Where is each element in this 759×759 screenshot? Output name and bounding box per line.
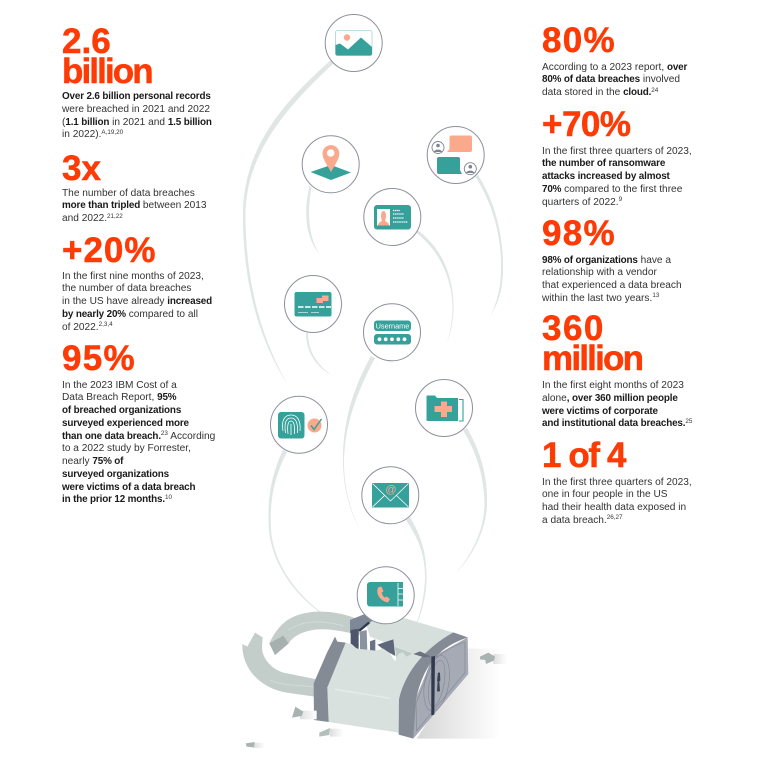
text: 95%: in the prior 12 months.10 bbox=[62, 494, 172, 505]
text: 360 million bbox=[542, 380, 692, 429]
text: 1 of 4: one in four people in the US bbox=[542, 489, 668, 500]
icon: image bbox=[325, 14, 382, 72]
text: +20%: by nearly 20% compared to all bbox=[62, 309, 198, 320]
icon: ID card bbox=[364, 188, 421, 246]
heading: 2.6 billion: 2.6 bbox=[62, 22, 111, 61]
stat: +70% bbox=[542, 105, 692, 208]
text: 95% bbox=[62, 380, 215, 505]
broken interior bbox=[350, 613, 373, 633]
text: 1 of 4: In the first three quarters of 2023, bbox=[542, 476, 692, 488]
stat: 98% bbox=[542, 214, 682, 304]
text: 98%: relationship with a vendor bbox=[542, 267, 657, 278]
text: 98%: 98% of organizations have a bbox=[542, 254, 671, 266]
heading: 95%: 95% bbox=[62, 339, 136, 378]
rubble fragments bbox=[300, 711, 317, 719]
shackle broken piece bbox=[242, 633, 320, 697]
heading: 360 million: million bbox=[542, 339, 642, 378]
text: 2.6 billion: Over 2.6 billion personal records bbox=[62, 91, 211, 102]
connecting curves bbox=[243, 60, 503, 637]
text: 95%: surveyed experienced more bbox=[62, 418, 189, 429]
text: +70%: quarters of 2022.9 bbox=[542, 196, 622, 208]
text: 2.6 billion: in 2022).A,19,20 bbox=[62, 129, 123, 140]
text: 95%: than one data breach.23 According bbox=[62, 430, 215, 442]
text: +20%: in the US have already increased bbox=[62, 296, 212, 307]
heading: 360 million bbox=[542, 309, 642, 378]
stat: 80% bbox=[542, 21, 688, 98]
heading: 3x: 3x bbox=[62, 149, 101, 188]
text: 3x: more than tripled between 2013 bbox=[62, 200, 207, 211]
text: 2.6 billion bbox=[62, 91, 212, 140]
text: 98%: within the last two years.13 bbox=[542, 292, 659, 304]
stat: 95% bbox=[62, 339, 215, 505]
left band bbox=[314, 637, 346, 722]
text: 3x: and 2022.21,22 bbox=[62, 212, 123, 224]
text: 360 million: alone, over 360 million people bbox=[542, 393, 678, 404]
heading: 360 million: 360 bbox=[542, 309, 605, 348]
heading: 2.6 billion bbox=[62, 22, 152, 91]
shackle back piece bbox=[269, 612, 360, 655]
text: 1 of 4: had their health data exposed in bbox=[542, 502, 686, 513]
stat: 3x bbox=[62, 149, 207, 224]
text: 80% bbox=[542, 62, 688, 98]
text: +70%: 70% compared to the first three bbox=[542, 184, 682, 195]
stat: 1 of 4 bbox=[542, 436, 692, 526]
text: +70%: attacks increased by almost bbox=[542, 171, 670, 182]
heading: 98%: 98% bbox=[542, 214, 616, 253]
text: 95%: were victims of a data breach bbox=[62, 482, 195, 492]
text: +70%: In the first three quarters of 2023, bbox=[542, 146, 692, 156]
text: 95%: surveyed organizations bbox=[62, 469, 169, 480]
heading: 2.6 billion: billion bbox=[62, 52, 152, 91]
text: +70% bbox=[542, 146, 692, 208]
text: 1 of 4 bbox=[542, 476, 692, 526]
right band bbox=[399, 632, 468, 739]
icon: username and password: Username bbox=[376, 322, 409, 331]
text: 80%: According to a 2023 report, over bbox=[542, 62, 687, 72]
stat: +20% bbox=[62, 231, 212, 332]
keyhole bbox=[437, 673, 440, 691]
icon: phone bbox=[357, 567, 414, 624]
text: 1 of 4: a data breach.26,27 bbox=[542, 514, 623, 526]
text: +20%: the number of data breaches bbox=[62, 283, 191, 294]
text: 3x bbox=[62, 188, 207, 224]
text: 80%: data stored in the cloud.24 bbox=[542, 86, 658, 98]
text: +70%: the number of ransomware bbox=[542, 158, 665, 169]
lock top face bbox=[363, 615, 453, 655]
text: +20%: of 2022.2,3,4 bbox=[62, 321, 113, 332]
text: 2.6 billion: were breached in 2021 and 2022 bbox=[62, 104, 210, 115]
text: +20% bbox=[62, 270, 212, 332]
icon: medical folder bbox=[416, 380, 472, 436]
stat: 360 million bbox=[542, 309, 692, 429]
icon: credit card bbox=[284, 276, 342, 332]
heading: 1 of 4: 1 of 4 bbox=[542, 436, 625, 475]
text: 98%: that experienced a data breach bbox=[542, 280, 682, 291]
text: 80%: 80% of data breaches involved bbox=[542, 74, 680, 85]
icon: email: @ bbox=[385, 484, 397, 496]
dark strip bbox=[431, 656, 435, 715]
text: 3x: The number of data breaches bbox=[62, 188, 195, 198]
icon: chat bbox=[427, 126, 484, 184]
heading: 80%: 80% bbox=[542, 21, 616, 60]
broken padlock bbox=[242, 612, 507, 748]
stat: 2.6 billion bbox=[62, 22, 212, 140]
text: 95%: Data Breach Report, 95% bbox=[62, 392, 176, 403]
heading: +20%: +20% bbox=[62, 231, 156, 270]
lock front face bbox=[327, 643, 421, 733]
heading: +70%: +70% bbox=[542, 105, 630, 144]
icon: username and password bbox=[364, 304, 420, 361]
text: 2.6 billion: (1.1 billion in 2021 and 1.5 billion bbox=[62, 116, 212, 128]
text: 95%: to a 2022 study by Forrester, bbox=[62, 443, 191, 454]
right face bbox=[413, 637, 468, 739]
text: 98% bbox=[542, 254, 682, 304]
icon: fingerprint with check bbox=[270, 396, 328, 453]
text: 95%: of breached organizations bbox=[62, 405, 181, 416]
icon: location pin bbox=[302, 136, 359, 193]
text: 95%: nearly 75% of bbox=[62, 456, 123, 467]
icon: email bbox=[362, 467, 419, 524]
text: 360 million: and institutional data breaches.25 bbox=[542, 418, 692, 429]
text: 95%: In the 2023 IBM Cost of a bbox=[62, 380, 177, 390]
text: +20%: In the first nine months of 2023, bbox=[62, 270, 204, 282]
ground shadow bbox=[417, 649, 500, 739]
text: 360 million: In the first eight months of 2023 bbox=[542, 380, 684, 391]
text: 360 million: were victims of corporate bbox=[542, 406, 658, 416]
